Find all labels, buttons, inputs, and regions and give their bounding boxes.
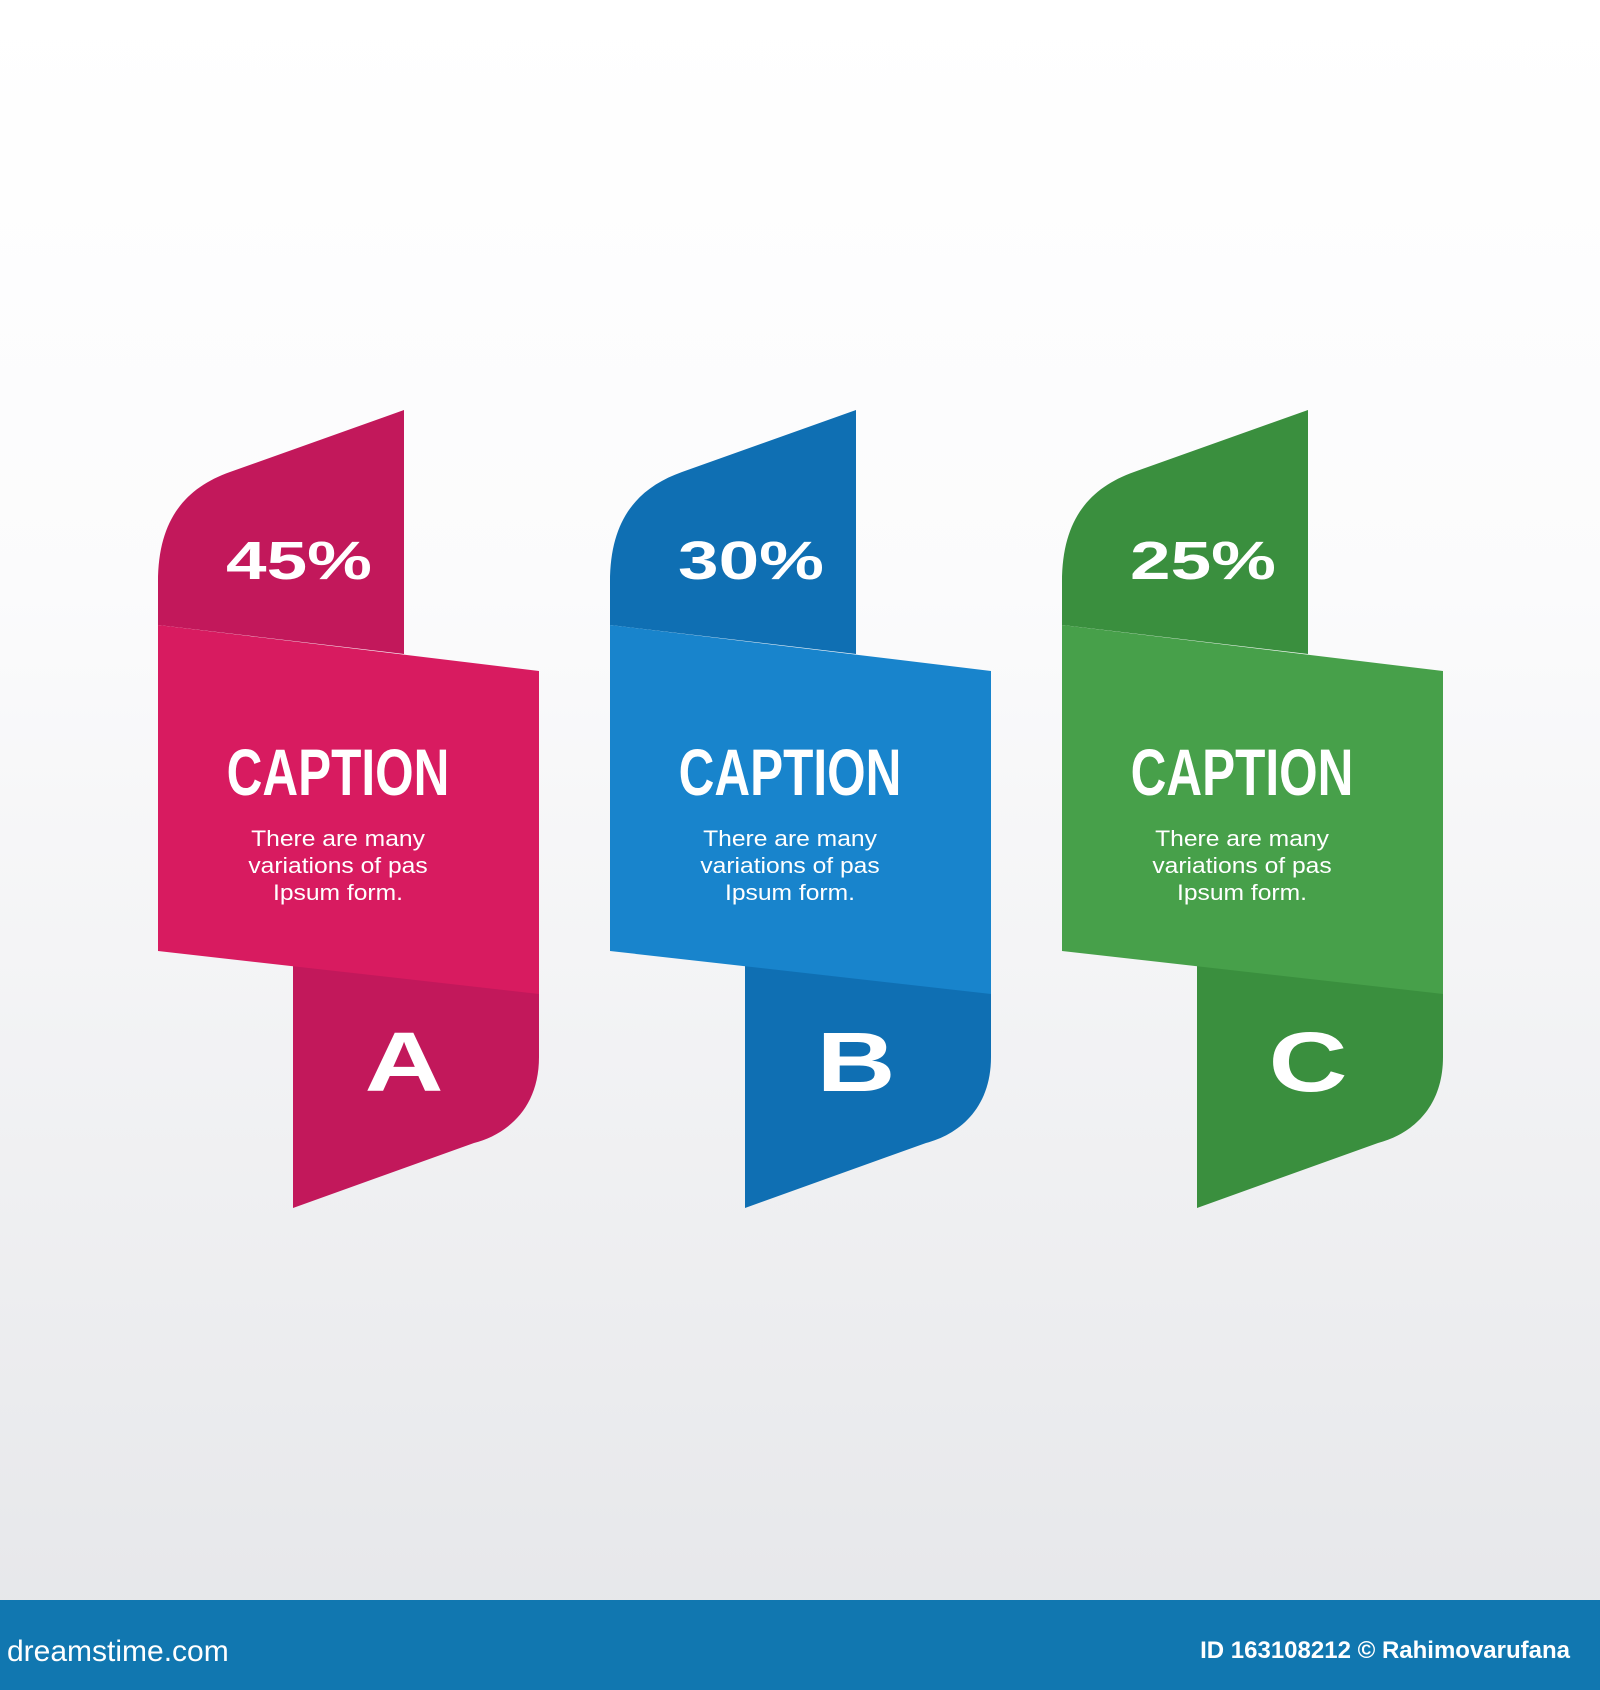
percentage B: 30%: [678, 530, 824, 591]
body text C: variations of pas: [1152, 853, 1332, 878]
body text A: [248, 826, 428, 905]
percentage C: 25%: [1130, 530, 1276, 591]
panel: C: [1062, 410, 1443, 1208]
body text C: [1152, 826, 1332, 905]
panel: A: [158, 410, 539, 1208]
body text B: variations of pas: [700, 853, 880, 878]
caption B: CAPTION: [679, 736, 901, 810]
footer id text: ID 163108212 © Rahimovarufana: [1200, 1637, 1570, 1664]
body text A: There are many: [251, 826, 425, 851]
footer logo text: dreamstime.com: [7, 1635, 229, 1668]
body text B: There are many: [703, 826, 877, 851]
caption C: CAPTION: [1131, 736, 1353, 810]
body text B: Ipsum form.: [725, 880, 855, 905]
body text C: Ipsum form.: [1177, 880, 1307, 905]
body text B: [700, 826, 880, 905]
body text A: Ipsum form.: [273, 880, 403, 905]
body text C: There are many: [1155, 826, 1329, 851]
percentage A: 45%: [226, 530, 372, 591]
panel: B: [610, 410, 991, 1208]
letter A: A: [365, 1015, 443, 1109]
body text A: variations of pas: [248, 853, 428, 878]
caption A: CAPTION: [227, 736, 449, 810]
letter B: B: [817, 1015, 895, 1109]
footer bar: [0, 1600, 1600, 1690]
letter C: C: [1269, 1015, 1347, 1109]
